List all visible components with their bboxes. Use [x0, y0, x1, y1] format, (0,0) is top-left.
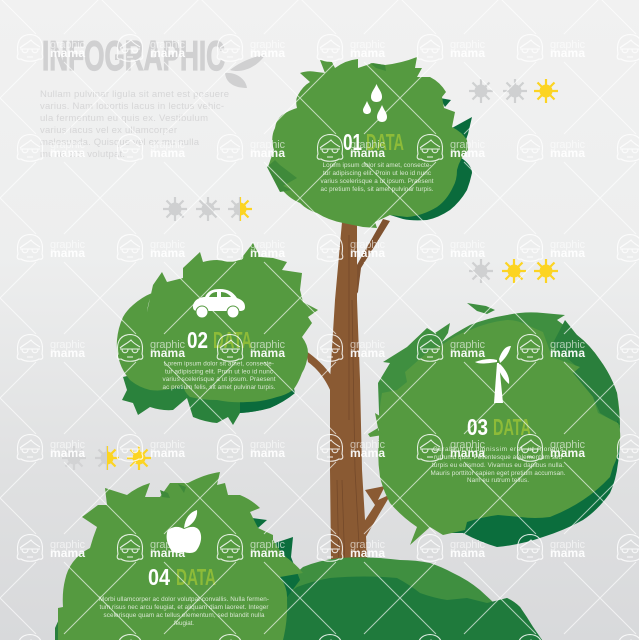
watermark wordmarks: graphic: [350, 439, 386, 451]
watermark wordmarks: graphic: [150, 339, 186, 351]
watermark wordmarks: mama: [50, 46, 85, 60]
rating: tree 04 suns: [62, 446, 151, 470]
watermark wordmarks: mama: [150, 546, 185, 560]
03 DATA heading: DATA: [493, 414, 531, 440]
title: INFOGRAPHIC: INFOGRAPHIC: [42, 32, 225, 79]
tree 02 text: Lorem ipsum dolor sit amet, consecte-: [164, 360, 274, 368]
watermark wordmarks: graphic: [450, 239, 486, 251]
tree 02 crown: [117, 243, 318, 402]
03 DATA heading: 03: [467, 414, 488, 440]
watermark wordmarks: mama: [350, 446, 385, 460]
panel: tree 04: [55, 472, 303, 640]
watermark wordmarks: graphic: [450, 139, 486, 151]
watermark wordmarks: mama: [550, 546, 585, 560]
watermark wordmarks: mama: [250, 46, 285, 60]
intro text block: mu auctor volutpat.: [40, 149, 125, 160]
watermark wordmarks: graphic: [150, 139, 186, 151]
watermark wordmarks: graphic: [450, 439, 486, 451]
watermark wordmarks: graphic: [250, 539, 286, 551]
intro text block: varius. Nam lobortis lacus in lectus vehic-: [40, 101, 224, 112]
tree 03 text: Nam eu rutrum tellus.: [467, 477, 529, 484]
watermark wordmarks: mama: [350, 146, 385, 160]
bush at base of trunk: [280, 557, 542, 640]
panel: tree 03: [368, 303, 620, 547]
panel: tree 01: [267, 57, 472, 228]
intro text block: ula fermentum eu quis ex. Vestibulum: [40, 113, 208, 124]
watermark wordmarks: graphic: [550, 339, 586, 351]
tree 01 text: ac pretium felis, sit amet pulvinar turpis.: [320, 186, 434, 193]
watermark wordmarks: graphic: [50, 239, 86, 251]
watermark wordmarks: mama: [250, 446, 285, 460]
icon: apple: [167, 510, 201, 553]
tree 01 text: Lorem ipsum dolor sit amet, consecte-: [322, 162, 432, 169]
watermark wordmarks: mama: [150, 446, 185, 460]
tree 04 text: feugiat.: [174, 620, 194, 627]
watermark wordmarks: mama: [150, 146, 185, 160]
watermark wordmarks: graphic: [350, 539, 386, 551]
watermark wordmarks: graphic: [350, 239, 386, 251]
watermark wordmarks: mama: [550, 246, 585, 260]
tree 03 side leaves: [368, 413, 383, 437]
03 DATA heading: [467, 414, 531, 440]
watermark wordmarks: mama: [350, 46, 385, 60]
watermark wordmarks: mama: [450, 546, 485, 560]
watermark wordmarks: mama: [250, 246, 285, 260]
tree 01 text: varius scelerisque a ut ipsum. Praesent: [320, 178, 434, 185]
02 DATA heading: [187, 327, 252, 353]
watermark wordmarks: graphic: [550, 239, 586, 251]
watermark wordmarks: graphic: [50, 539, 86, 551]
rating: tree 02 suns: [163, 197, 252, 221]
watermark wordmarks: mama: [250, 146, 285, 160]
tree 01 text: [320, 162, 434, 193]
intro text block: [40, 89, 229, 160]
01 DATA heading: DATA: [366, 129, 404, 155]
watermark wordmarks: mama: [350, 246, 385, 260]
watermark wordmarks: mama: [550, 446, 585, 460]
watermark wordmarks: graphic: [150, 539, 186, 551]
watermark wordmarks: mama: [450, 446, 485, 460]
intro text block: varius lacus vel ex ullamcorper: [40, 125, 177, 136]
02 DATA heading: 02: [187, 327, 208, 353]
watermark wordmarks: [50, 39, 586, 560]
tree 04 small leaves: [160, 484, 186, 498]
icon: car: [193, 289, 245, 318]
watermark wordmarks: mama: [450, 346, 485, 360]
rating: tree 01 suns: [469, 79, 558, 103]
watermark wordmarks: graphic: [250, 439, 286, 451]
tree 01 small leaves: [267, 63, 386, 192]
watermark wordmarks: graphic: [550, 39, 586, 51]
watermark wordmarks: mama: [50, 246, 85, 260]
02 DATA heading: DATA: [213, 327, 252, 353]
watermark wordmarks: mama: [250, 546, 285, 560]
tree 03 text: rutrumd quis. Pellentesque a elementum sed: [434, 454, 562, 461]
icon: title leaf: [225, 55, 265, 88]
tree 02 text: tur adipiscing elit. Proin ut leo id nunc: [165, 368, 273, 376]
tree 03 floating leaf: [467, 303, 495, 314]
01 DATA heading: [343, 129, 404, 155]
watermark wordmarks: mama: [550, 146, 585, 160]
intro text block: malesuada. Quisque vel ex mu nulla: [40, 137, 200, 148]
tree 04 text: tum risus nec arcu feugiat, et aliquam diam laoreet. Integer: [100, 604, 268, 611]
intro text block: Nullam pulvinar ligula sit amet est posuere: [40, 89, 229, 100]
tree 04 shadow foliage: [252, 518, 300, 600]
watermark wordmarks: graphic: [550, 539, 586, 551]
watermark wordmarks: graphic: [50, 439, 86, 451]
watermark wordmarks: graphic: [250, 139, 286, 151]
tree 01 crown: [268, 57, 468, 228]
watermark wordmarks: graphic: [50, 339, 86, 351]
01 DATA heading: 01: [343, 129, 362, 155]
tree 03 text: [430, 446, 566, 484]
icon: water drops: [363, 84, 387, 122]
tree 02 shadow foliage: [122, 370, 295, 425]
rating: tree 03 suns: [469, 259, 558, 283]
watermark wordmarks: graphic: [250, 339, 286, 351]
watermark wordmarks: graphic: [350, 339, 386, 351]
watermark wordmarks: mama: [150, 346, 185, 360]
watermark wordmarks: mama: [50, 546, 85, 560]
watermark wordmarks: mama: [550, 346, 585, 360]
04 DATA heading: 04: [148, 564, 170, 590]
watermark wordmarks: mama: [50, 346, 85, 360]
tree trunk and branches: [301, 219, 391, 640]
04 DATA heading: [148, 564, 216, 590]
watermark wordmarks: graphic: [450, 539, 486, 551]
tree 04 crown: [58, 472, 303, 640]
watermark wordmarks: graphic: [350, 39, 386, 51]
watermark wordmarks: graphic: [250, 39, 286, 51]
watermark wordmarks: graphic: [450, 39, 486, 51]
watermark wordmarks: mama: [450, 46, 485, 60]
tree 02 text: [162, 360, 276, 391]
tree 03 text: turpis eu euismod. Vivamus eu dapibus nulla.: [432, 462, 564, 469]
watermark wordmarks: mama: [450, 146, 485, 160]
watermark wordmarks: mama: [50, 146, 85, 160]
panel: tree 02: [117, 243, 318, 425]
watermark wordmarks: graphic: [350, 139, 386, 151]
watermark wordmarks: graphic: [150, 39, 186, 51]
watermark wordmarks: mama: [50, 446, 85, 460]
watermark wordmarks: mama: [550, 46, 585, 60]
tree 03 crown: [378, 320, 620, 545]
tree 04 text: scelerisque quam ac tellus elementum, sed blandit nulla: [104, 612, 265, 619]
tree 03 mid foliage: [378, 312, 620, 480]
watermark wordmarks: graphic: [550, 439, 586, 451]
watermark wordmarks: graphic: [550, 139, 586, 151]
tree 02 text: ac pretium felis, sit amet pulvinar turpis.: [162, 384, 276, 391]
watermark wordmarks: graphic: [150, 439, 186, 451]
tree 04 text: [99, 596, 269, 627]
watermark wordmarks: mama: [150, 46, 185, 60]
watermark wordmarks: mama: [450, 246, 485, 260]
tree 01 text: tur adipiscing elit. Proin ut leo id nunc: [323, 170, 431, 177]
icon: wind turbine: [475, 346, 511, 403]
watermark wordmarks: graphic: [250, 239, 286, 251]
04 DATA heading: DATA: [176, 564, 216, 590]
watermark wordmarks: mama: [350, 346, 385, 360]
tree 01 shadow foliage: [390, 98, 472, 220]
tree 04 text: Morbi ullamcorper ac dolor volutpat convallis. Nulla fermen-: [99, 596, 269, 603]
watermark wordmarks: graphic: [50, 39, 86, 51]
watermark wordmarks: graphic: [150, 239, 186, 251]
watermark wordmarks: mama: [150, 246, 185, 260]
tree 03 text: Mauris porttitor sapien eget pretium accumsan.: [430, 470, 566, 477]
watermark wordmarks: graphic: [50, 139, 86, 151]
tree 03 dark foliage: [443, 420, 620, 547]
watermark wordmarks: mama: [350, 546, 385, 560]
watermark wordmarks: mama: [250, 346, 285, 360]
tree 03 right band: [552, 320, 620, 425]
tree 02 text: varius scelerisque a ut ipsum. Praesent: [162, 376, 276, 383]
watermark wordmarks: graphic: [450, 339, 486, 351]
tree 03 text: Curabitur ut dignissim erat, ut rhoncus: [433, 446, 563, 453]
